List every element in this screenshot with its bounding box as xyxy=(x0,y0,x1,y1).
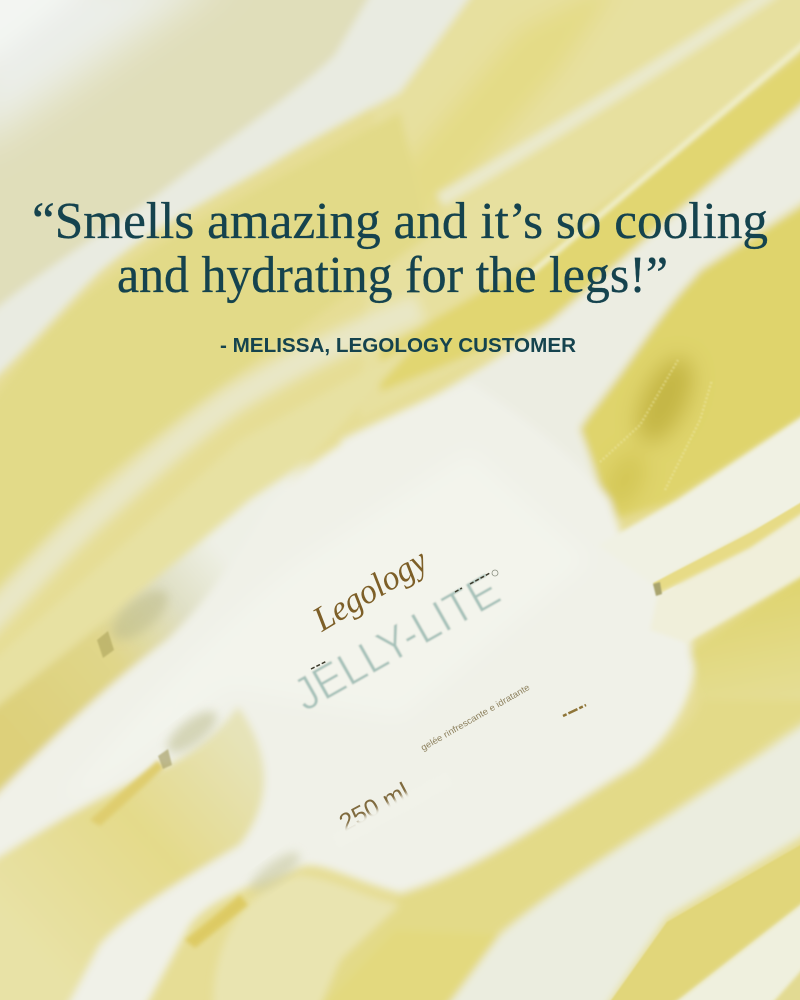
yellow band below tube xyxy=(300,700,800,1000)
white highlight: tube centre xyxy=(60,450,590,800)
yellow wedge: left xyxy=(0,460,310,822)
small label text: gelée rinfrescante e idratante xyxy=(419,682,531,753)
upper-right yellow field xyxy=(360,0,800,420)
upper-left white band xyxy=(0,0,490,400)
yellow block: right xyxy=(690,555,800,780)
gold foil dash xyxy=(563,705,586,716)
upper-left yellow field xyxy=(0,112,430,620)
main white tube xyxy=(0,382,694,1000)
lower-centre yellow xyxy=(213,875,400,1000)
bubble texture lines xyxy=(600,360,712,490)
lower-left yellow notch xyxy=(0,706,264,1000)
foil dashes above the name xyxy=(311,573,490,669)
olive shadow spot xyxy=(596,349,704,515)
registered mark xyxy=(492,570,498,576)
quote line 2: and hydrating for the legs!” xyxy=(117,247,668,304)
attribution: - MELISSA, LEGOLOGY CUSTOMER xyxy=(220,334,576,357)
strong yellow upper band xyxy=(400,0,620,230)
thin light line xyxy=(525,22,800,278)
strong yellow stripe xyxy=(380,30,800,392)
right band: second stripe xyxy=(598,398,800,585)
quote line 1: “Smells amazing and it’s so cooling xyxy=(32,193,768,250)
volume: 250 ml: 250 ml xyxy=(335,777,414,837)
bottom yellow xyxy=(300,930,500,1000)
corner yellow xyxy=(750,940,800,1000)
top-left white corner xyxy=(0,0,230,150)
thin yellow strip xyxy=(653,485,800,594)
pale band under strip xyxy=(650,495,800,643)
top-left pale field xyxy=(0,0,420,340)
product label xyxy=(284,540,586,842)
white mask over lower volume text xyxy=(335,778,450,842)
product name: JELLY-LITE: JELLY-LITE xyxy=(284,563,508,721)
shadows and dashes on the tube xyxy=(90,582,662,948)
soft streak: top right xyxy=(440,0,775,200)
logo: Legology: Legology xyxy=(305,540,435,639)
pale ribbon: mid-left xyxy=(0,308,420,640)
lower white ribbon xyxy=(430,708,800,1000)
right white band xyxy=(340,80,800,640)
white ribbon: bottom right corner xyxy=(640,882,800,1000)
right yellow field xyxy=(580,190,800,520)
pale yellow above edge xyxy=(0,340,420,730)
yellow strip: bottom right xyxy=(590,828,800,1000)
